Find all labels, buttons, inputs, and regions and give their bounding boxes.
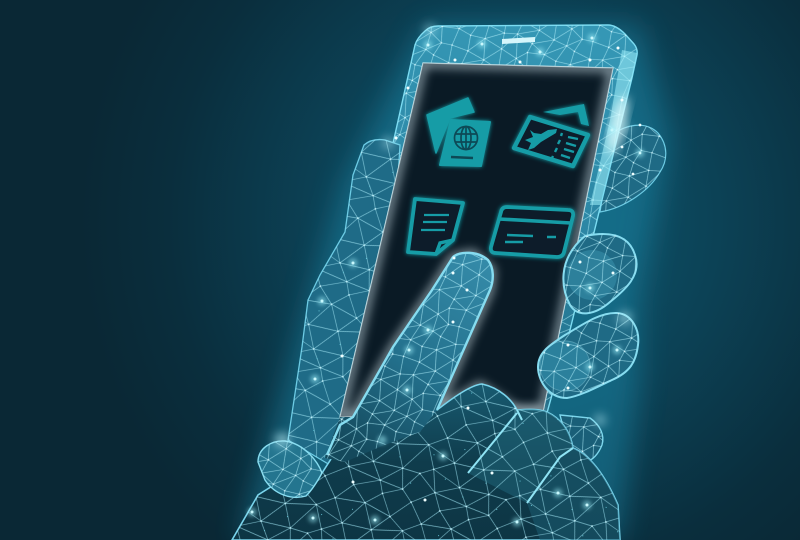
ticket lines	[552, 133, 578, 158]
top right fingertip behind phone	[600, 125, 666, 212]
plane	[525, 129, 557, 150]
light blooms	[275, 25, 631, 447]
screen inner grey glow	[340, 63, 613, 417]
third right finger	[538, 313, 638, 398]
boarding pass icon	[514, 104, 589, 166]
pointing finger	[325, 253, 493, 462]
passport globe	[454, 126, 478, 150]
back of hand: left finger strip	[288, 140, 400, 465]
phone screen	[340, 63, 613, 417]
credit card icon	[491, 207, 573, 257]
finger outline	[327, 253, 493, 455]
palm fold lines	[468, 410, 573, 503]
palm and thumb	[232, 384, 620, 540]
phone frame mesh	[330, 25, 637, 425]
passport bar	[451, 157, 473, 158]
halo around pointing finger and knuckles	[353, 253, 543, 417]
second right finger	[563, 234, 637, 313]
fourth right finger	[560, 415, 603, 461]
bright bloom on phone right edge	[604, 94, 632, 156]
phone body	[330, 25, 637, 425]
star node glows	[252, 38, 640, 522]
document lines	[421, 215, 449, 230]
document icon	[408, 199, 463, 254]
phone edge highlight	[590, 50, 637, 205]
palm nodes	[252, 408, 587, 522]
thumb	[258, 441, 322, 497]
palm mesh	[232, 384, 620, 540]
earpiece	[502, 37, 535, 44]
knuckle fills	[468, 409, 573, 503]
phone frame nodes	[396, 38, 622, 170]
cyan glow behind the hand and phone	[240, 25, 670, 540]
passport icon	[427, 98, 490, 166]
